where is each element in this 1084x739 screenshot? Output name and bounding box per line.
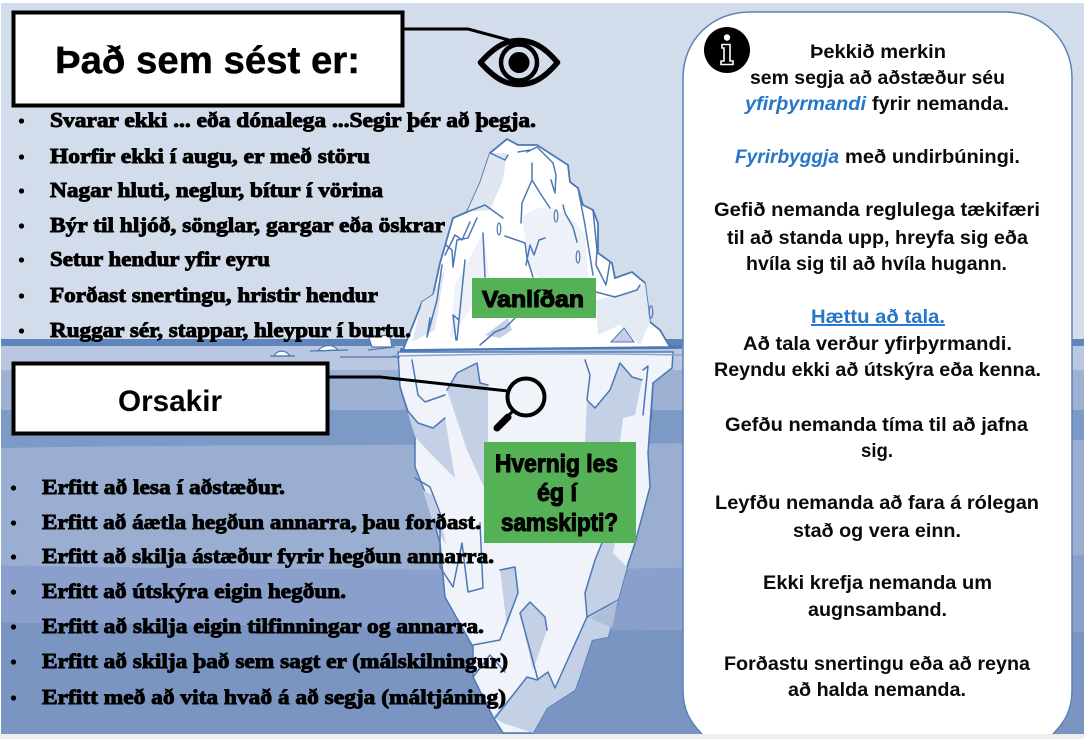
list: visible signs: Setur hendur yfir eyru [50,247,270,271]
text: avoid touch: Forðastu snertingu eða að reyna [724,653,1030,675]
text: prevent with preparation [735,146,1020,168]
label: Hvernig les ég í samskipti [484,442,636,543]
list: causes: Erfitt að skilja eigin tilfinningar og annarra. [42,614,484,638]
text: quiet place [715,492,1039,542]
text: stop talking: Reyndu ekki að útskýra eða kenna. [714,359,1041,381]
ice floes [270,335,400,357]
text: recognise the signs: Þekkið merkin [810,41,946,63]
iceberg [270,139,683,733]
connector to eye [404,29,509,40]
text: regular breaks: til að standa upp, hreyfa sig eða [727,227,1028,249]
label: Hvernig les ég í samskipti: ég í [537,479,578,507]
panel: causes box [14,364,328,434]
text: give time [725,414,1028,462]
label: Vanlíðan [472,278,596,318]
text: give time: sig. [861,440,893,462]
text: quiet place: Leyfðu nemanda að fara á rólegan [715,492,1039,514]
text: recognise the signs [744,41,1009,115]
text: regular breaks: Gefið nemanda reglulega tækifæri [714,199,1040,221]
icon: magnifying glass [497,378,544,428]
list: causes: Erfitt að útskýra eigin hegðun. [42,579,346,603]
text: recognise the signs: yfirþyrmandi [744,93,867,115]
panel: advice [683,12,1072,734]
text: recognise the signs: fyrir nemanda. [872,93,1009,115]
list: visible signs: Býr til hljóð, sönglar, gargar eða öskrar [50,213,445,237]
connector to magnifier [329,377,508,391]
list: causes [11,475,508,709]
list: causes: Erfitt að áætla hegðun annarra, þau forðast. [42,510,481,534]
list: visible signs: Svarar ekki ... eða dónalega ...Segir þér að þegja. [50,108,536,132]
list: causes: Erfitt að skilja ástæður fyrir hegðun annarra. [42,544,494,568]
list: visible signs: Forðast snertingu, hristir hendur [50,283,378,307]
icon: info [704,27,750,73]
heading: Orsakir: Orsakir [118,385,222,418]
text: prevent with preparation: Fyrirbyggja [735,146,839,168]
list: visible signs: Horfir ekki í augu, er með störu [50,144,370,168]
text: eye contact [763,572,992,621]
panel: title box [14,12,402,106]
text: avoid touch [724,653,1030,701]
list: causes: Erfitt að lesa í aðstæður. [42,475,285,499]
text: give time: Gefðu nemanda tíma til að jafna [725,414,1028,436]
text: stop talking: Hættu að tala. [811,306,945,328]
list: visible signs: Ruggar sér, stappar, hleypur í burtu. [50,318,411,342]
iceberg: underwater part [398,352,673,733]
iceberg: visible tip [403,139,670,350]
text: stop talking [714,306,1041,381]
text: recognise the signs: sem segja að aðstæður séu [750,67,1005,89]
list: causes: Erfitt að skilja það sem sagt er (málskilningur) [42,649,508,673]
text: regular breaks [714,199,1040,275]
icon: eye [480,40,558,84]
label: Hvernig les ég í samskipti: Hvernig les [495,450,618,478]
label: Vanlíðan: Vanlíðan [482,286,584,312]
text: regular breaks: hvíla sig til að hvíla hugann. [746,253,1007,275]
text: eye contact: augnsamband. [808,599,947,621]
text: eye contact: Ekki krefja nemanda um [763,572,992,594]
list: visible signs: Nagar hluti, neglur, bítur í vörina [50,178,384,202]
iceberg: surface water line [392,347,683,356]
heading: Það sem sést er: Það sem sést er: [55,40,360,82]
text: prevent with preparation: með undirbúningi. [845,146,1020,168]
label: Hvernig les ég í samskipti: samskipti? [501,509,618,537]
text: stop talking: Að tala verður yfirþyrmandi. [743,333,1012,355]
text: quiet place: stað og vera einn. [793,520,961,542]
text: avoid touch: að halda nemanda. [788,679,966,701]
list: visible signs [19,108,536,342]
list: causes: Erfitt með að vita hvað á að segja (máltjáning) [42,685,506,709]
